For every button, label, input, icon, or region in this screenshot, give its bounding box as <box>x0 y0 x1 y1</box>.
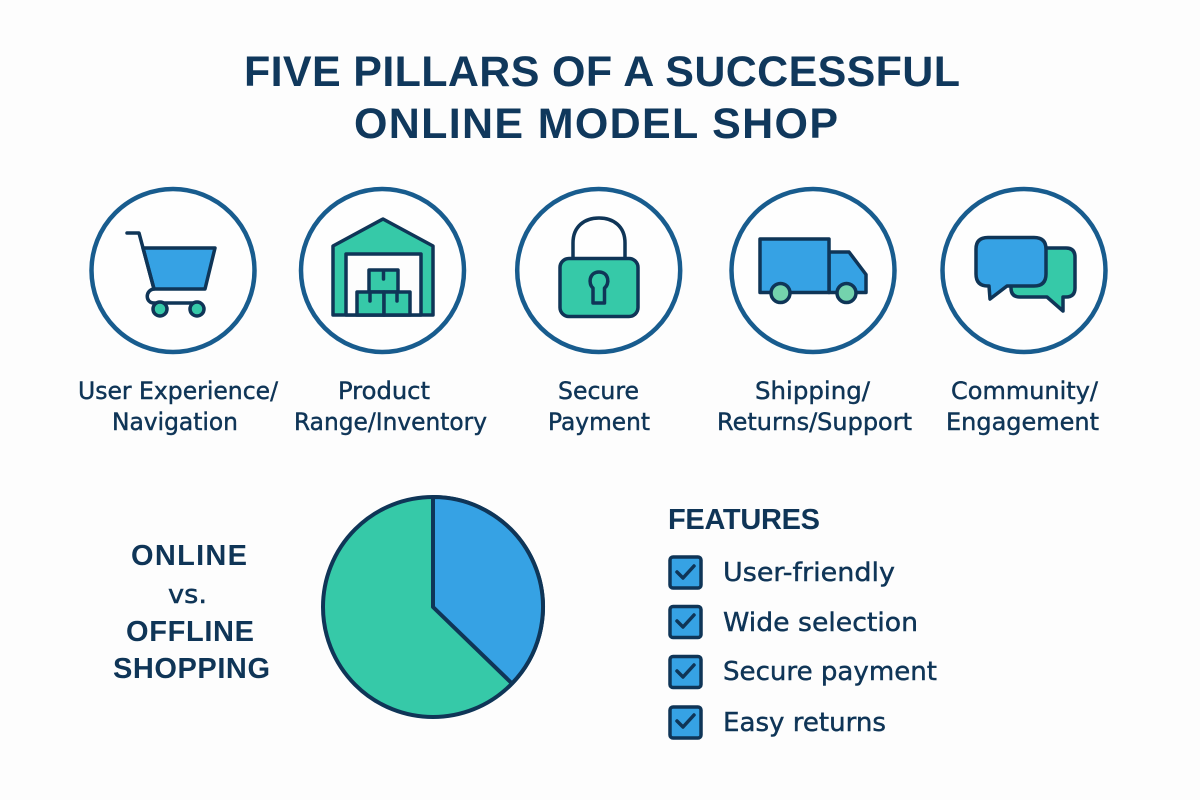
label: shipping: Returns/Support <box>717 408 912 436</box>
label: user experience: User Experience/ <box>78 377 279 405</box>
feature: wide selection: Wide selection <box>723 608 918 638</box>
icon: shopping cart <box>92 189 254 352</box>
icon: padlock <box>517 189 680 352</box>
heading: online vs offline shopping: SHOPPING <box>113 653 270 685</box>
label: shipping <box>717 377 912 436</box>
heading: online vs offline shopping <box>113 540 270 685</box>
title: ONLINE MODEL SHOP <box>354 100 838 148</box>
pie chart <box>323 497 543 717</box>
label: secure payment: Secure <box>558 377 639 405</box>
label: community: Engagement <box>946 408 1099 436</box>
feature: secure payment: Secure payment <box>723 657 937 687</box>
label: secure payment <box>548 377 650 436</box>
features list <box>668 504 937 738</box>
feature: user-friendly: User-friendly <box>723 558 895 588</box>
heading: features: FEATURES <box>668 504 820 536</box>
feature: easy returns: Easy returns <box>723 708 886 738</box>
heading: online vs offline shopping: vs. <box>168 580 207 610</box>
icon: speech bubbles <box>942 189 1106 352</box>
pillar: product range <box>294 189 487 436</box>
icon: delivery truck <box>732 189 894 352</box>
pillar: community <box>942 189 1106 436</box>
label: secure payment: Payment <box>548 408 650 436</box>
label: product range <box>294 377 487 436</box>
title <box>244 48 960 148</box>
label: user experience <box>78 377 279 436</box>
label: user experience: Navigation <box>112 408 238 436</box>
pillar: shipping <box>717 189 912 436</box>
label: product range: Product <box>338 377 430 405</box>
icon: warehouse <box>301 189 464 352</box>
heading: online vs offline shopping: ONLINE <box>131 540 247 572</box>
pillar: secure payment <box>517 189 680 436</box>
label: community <box>946 377 1099 436</box>
heading: online vs offline shopping: OFFLINE <box>126 616 254 648</box>
label: shipping: Shipping/ <box>755 377 871 405</box>
label: product range: Range/Inventory <box>294 408 487 436</box>
label: community: Community/ <box>951 377 1099 405</box>
pillar: user experience <box>78 189 279 436</box>
title: FIVE PILLARS OF A SUCCESSFUL <box>244 48 960 96</box>
